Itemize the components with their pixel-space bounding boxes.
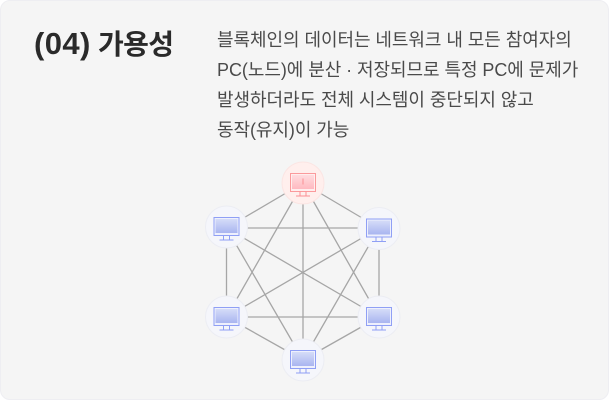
text block: description [217, 30, 578, 140]
icon: PC node (lower right) [358, 296, 400, 338]
icon: PC node (bottom) [282, 339, 324, 381]
icon: PC node (upper left) [206, 206, 248, 248]
icon: PC node (lower left) [206, 296, 248, 338]
text block: description: 발생하더라도 전체 시스템이 중단되지 않고 [217, 90, 534, 110]
text block: description: 동작(유지)이 가능 [217, 120, 349, 140]
title: (04) 가용성 [34, 23, 173, 63]
text block: description: 블록체인의 데이터는 네트워크 내 모든 참여자의 [217, 30, 572, 50]
icon: failed PC node (top) [282, 162, 324, 204]
text block: description: PC(노드)에 분산 · 저장되므로 특정 PC에 문제가 [217, 60, 578, 80]
network links [226, 183, 379, 360]
icon: PC node (upper right) [358, 208, 400, 250]
